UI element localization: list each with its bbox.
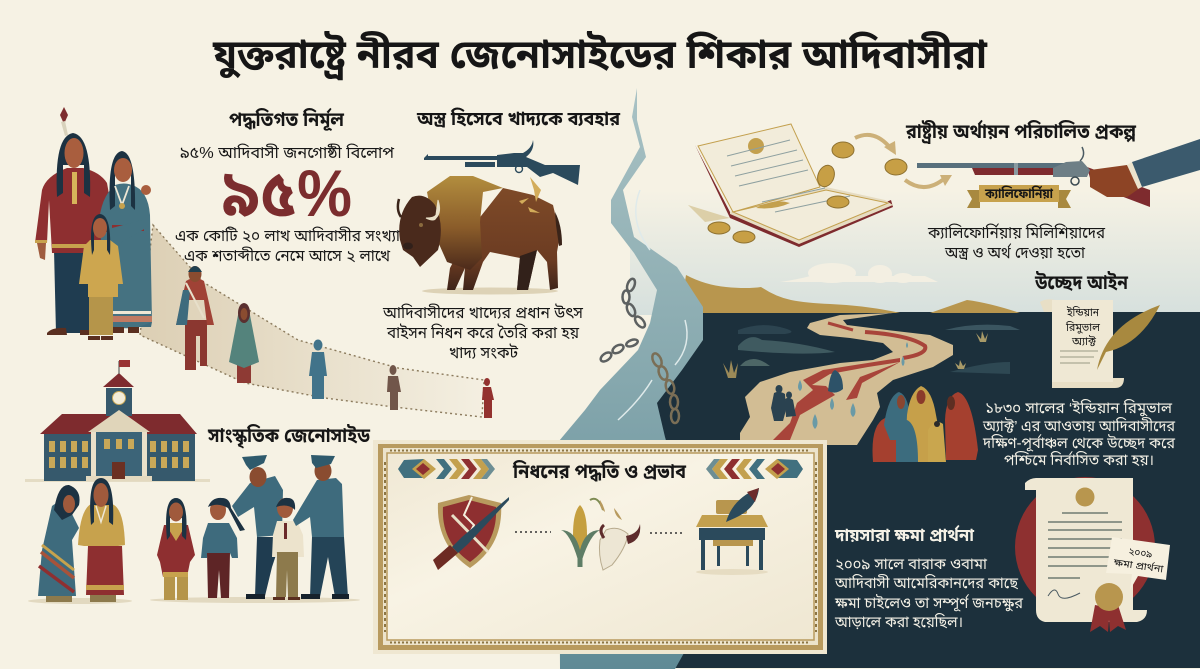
- icon: shrinking figure 1: [176, 266, 214, 370]
- text: food crisis: খাদ্য সংকট: [449, 343, 518, 362]
- icon: boarding school: [25, 360, 210, 482]
- text: Obama apology 2009: [834, 556, 1024, 631]
- river: [559, 88, 703, 669]
- icon: rifle: [424, 140, 580, 185]
- distant gold hills: [680, 275, 1020, 313]
- text: food crisis: [382, 303, 584, 362]
- text: Obama apology 2009: ক্ষমা চাইলেও তা সম্পূর্ণ জনচক্ষুর: [834, 594, 1024, 612]
- text: population decline: এক শতাব্দীতে নেমে আসে ২ লাখে: [184, 246, 390, 265]
- heading: removal law: উচ্ছেদ আইন: [1034, 270, 1128, 294]
- icon: huddled refugee group: [872, 386, 978, 462]
- text: Obama apology 2009: আদিবাসী আমেরিকানদের কাছে: [834, 575, 1019, 592]
- icon: Indian Removal Act scroll: ইন্ডিয়ান: [1066, 306, 1099, 319]
- text: population decline: [175, 226, 401, 265]
- icon: bison: [398, 176, 562, 294]
- panel: cultural genocide: [25, 360, 371, 604]
- boy one: [201, 523, 238, 558]
- speech tag: 2009 apology: ২০০৯: [1128, 546, 1153, 561]
- speech tag: 2009 apology: [1106, 537, 1170, 590]
- panel: systematic eradication: [35, 107, 494, 418]
- text: militias armed: [927, 223, 1105, 262]
- panel: removal act: [982, 270, 1176, 469]
- icon: Indian Removal Act scroll: অ্যাক্ট: [1071, 335, 1097, 348]
- icon: broken chains: [599, 278, 679, 423]
- icon: tear drops: [798, 342, 908, 429]
- heading: food as weapon: অস্ত্র হিসেবে খাদ্যকে ব্যবহার: [416, 108, 621, 130]
- icon: shrinking figure 5: [482, 378, 494, 418]
- boy two: [272, 521, 304, 557]
- big number 95 percent: ৯৫%: [222, 156, 352, 230]
- icon: Indian Removal Act scroll: [1040, 299, 1124, 388]
- text: 1830 removal act: [982, 400, 1176, 469]
- text: 1830 removal act: ১৮৩০ সালের ‘ইন্ডিয়ান রিমুভাল: [985, 400, 1173, 417]
- text: Obama apology 2009: আড়ালে করা হয়েছিল।: [834, 614, 963, 631]
- text: 1830 removal act: দক্ষিণ-পূর্বাঞ্চল থেকে উচ্ছেদ করে: [982, 434, 1176, 452]
- icon: shrinking figure 3: [309, 340, 327, 399]
- icon: withered corn: [561, 499, 603, 567]
- icon: musket and hand: [917, 139, 1200, 207]
- heading: methods and impact: নিধনের পদ্ধতি ও প্রভাব: [512, 459, 687, 483]
- clouds: [780, 263, 938, 283]
- ornament: left chevrons: [398, 459, 495, 479]
- icon: broken shield with rifle: [433, 495, 509, 570]
- icon: shrinking figure 2: [229, 303, 259, 383]
- icon: ledger book: [688, 124, 893, 247]
- icon: children and officers: [150, 455, 360, 603]
- arrows: money flow: [855, 135, 952, 187]
- panel: half-hearted apology: [834, 477, 1170, 632]
- heading: systematic eradication: পদ্ধতিগত নির্মূল: [229, 107, 345, 131]
- title: যুক্তরাষ্ট্রে নীরব জেনোসাইডের শিকার আদিবাসীরা: [212, 32, 988, 80]
- icon: bison skull: [599, 500, 640, 570]
- text: Obama apology 2009: ২০০৯ সালে বারাক ওবামা: [835, 556, 988, 573]
- icon: Indian Removal Act scroll: রিমুভাল: [1065, 321, 1101, 334]
- text: militias armed: ক্যালিফোর্নিয়ায় মিলিশিয়াদের: [927, 223, 1105, 242]
- heading: apology: দায়সারা ক্ষমা প্রার্থনা: [834, 525, 974, 545]
- text: 1830 removal act: অ্যাক্ট’ এর আওতায় আদিবাসীদের: [982, 418, 1176, 435]
- speech tag: 2009 apology: ক্ষমা প্রার্থনা: [1112, 556, 1164, 575]
- dark landscape ground: [640, 312, 1200, 668]
- heading: state-funded project: রাষ্ট্রীয় অর্থায়ন পরিচালিত প্রকল্প: [905, 119, 1137, 144]
- text: food crisis: বাইসন নিধন করে তৈরি করা হয়: [386, 323, 580, 342]
- heading: cultural genocide: সাংস্কৃতিক জেনোসাইড: [207, 423, 371, 449]
- officer one: [232, 476, 283, 537]
- panel: state-funded project: [688, 119, 1200, 262]
- icon: gold coins: [708, 142, 907, 243]
- text: militias armed: অস্ত্র ও অর্থ দেওয়া হতো: [944, 243, 1086, 262]
- text: population disappeared: ৯৫% আদিবাসী জনগোষ্ঠী বিলোপ: [180, 143, 395, 162]
- connector dots: [650, 532, 684, 534]
- text: food crisis: আদিবাসীদের খাদ্যের প্রধান উৎস: [382, 303, 584, 322]
- icon: quill: [1097, 305, 1160, 370]
- banner: California: ক্যালিফোর্নিয়া: [984, 186, 1053, 201]
- panel: food as weapon: [382, 108, 621, 362]
- icon: grieving mothers: [28, 478, 132, 604]
- text: population decline: এক কোটি ২০ লাখ আদিবাসীর সংখ্যা: [175, 226, 401, 245]
- girl: [157, 525, 195, 577]
- blood-stained winding road: [740, 313, 953, 445]
- icon: school desk and quill: [696, 488, 768, 575]
- banner: California: [967, 185, 1071, 208]
- connector dots: [515, 531, 551, 533]
- icon: family: [35, 107, 152, 340]
- icon: apology document: [1015, 477, 1170, 632]
- ornament: right chevrons: [706, 459, 803, 479]
- population decline funnel: [140, 225, 484, 417]
- icon: walking refugees on the road: [771, 370, 843, 421]
- officer two: [293, 478, 344, 537]
- text: 1830 removal act: পশ্চিমে নির্বাসিত করা হয়।: [1004, 451, 1154, 469]
- icon: shrinking figure 4: [387, 365, 401, 410]
- panel: methods of killing and impact: [373, 440, 827, 654]
